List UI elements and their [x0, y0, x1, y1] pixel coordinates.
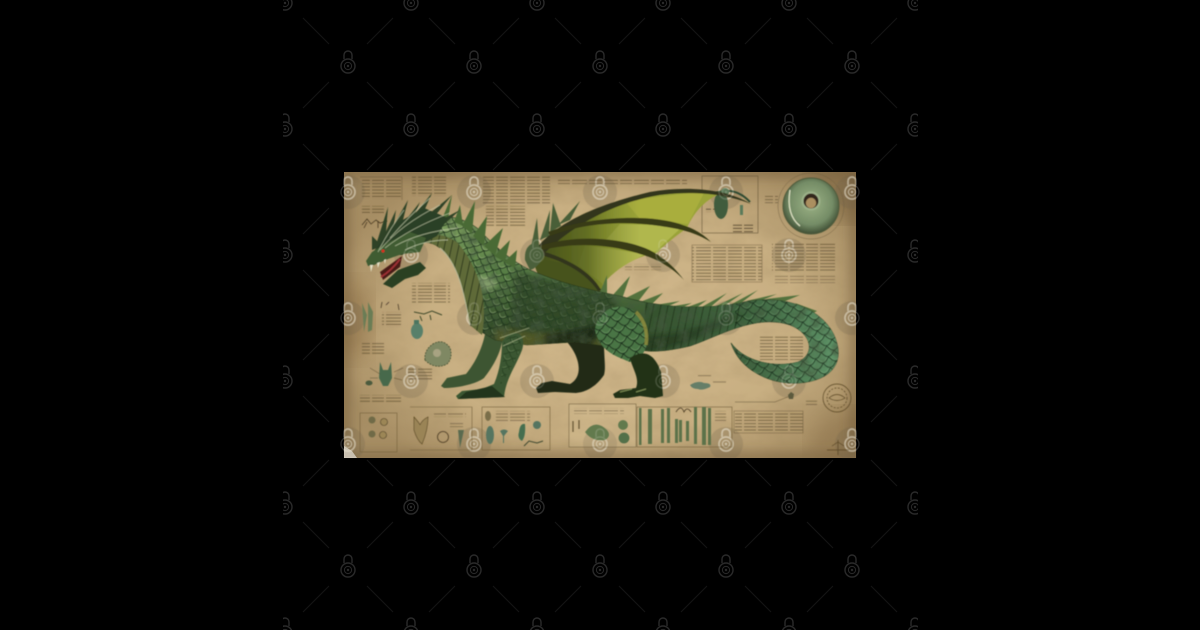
dark under wing [545, 325, 600, 350]
lower jaw [383, 262, 426, 288]
mouth [380, 256, 402, 280]
wing finger two [540, 239, 684, 280]
scales on neck and chest [398, 210, 528, 345]
sketch: claw study [414, 311, 442, 321]
upper head [366, 232, 426, 266]
hind lower leg and foot [613, 353, 663, 398]
sketch: green pod [411, 320, 423, 339]
note block top second [412, 176, 447, 196]
near hind leg [595, 307, 663, 398]
far hind leg [536, 335, 605, 393]
panel: specimen box 4 anatomy [569, 404, 636, 447]
neck underside plates [408, 235, 484, 335]
dragon head [366, 193, 517, 288]
note central right block [692, 245, 762, 282]
dragon body, neck and tail [398, 216, 838, 383]
note beside sketch [408, 367, 432, 380]
faint watermark over dragon [344, 172, 856, 458]
belly olive band [495, 328, 640, 355]
front leg scales [500, 336, 521, 386]
panel: specimen box 3 plants [482, 407, 550, 450]
note left lower [362, 342, 385, 355]
sketch: left margin squiggle [362, 219, 387, 228]
crest spikes [372, 193, 460, 250]
dragon [366, 188, 845, 399]
note inside tail curve [760, 335, 803, 360]
thigh edge [636, 312, 647, 345]
note block third continued [486, 206, 526, 226]
torso darker band [510, 272, 640, 350]
wing light panel lower [578, 245, 645, 284]
infographic: dragon anatomy parchment on watermarked black background [283, 0, 918, 630]
sketch: connector with tiny figure [735, 392, 817, 406]
wing lower root fold [535, 258, 602, 302]
eye [382, 250, 384, 252]
tail colouring [645, 295, 845, 390]
front leg shaft [456, 333, 523, 399]
wing spikes on shoulder [530, 201, 580, 252]
note small left [362, 206, 385, 213]
note below throat [412, 283, 450, 303]
front foot shade [458, 386, 505, 399]
note right block [772, 243, 837, 283]
sketch: cross-section scale disc [778, 173, 844, 239]
watermark pattern on black background [283, 0, 918, 630]
sketch: dragon head front view [366, 362, 403, 386]
torso scale texture [510, 272, 640, 350]
notes and sketches layer [360, 173, 851, 455]
sketch: ornament seal [823, 384, 851, 412]
sketch: bottom right corner mark [827, 440, 849, 455]
wing dark gradient near root [530, 188, 655, 303]
tongue [381, 259, 400, 277]
neck spikes [440, 195, 517, 268]
note block top left [360, 177, 402, 200]
note left mid [382, 314, 402, 326]
front leg ridge [500, 328, 529, 346]
chest highlight [471, 276, 497, 290]
panel: specimen box 1 [360, 413, 397, 452]
hind toe highlights [620, 389, 646, 392]
teeth [370, 259, 386, 272]
wing finger one [548, 218, 711, 242]
note eye label [765, 196, 778, 203]
sketch: organ cluster [425, 342, 451, 366]
tail underside shadow [640, 314, 745, 352]
note wing caption [624, 266, 662, 270]
note lower left caption [360, 395, 403, 402]
light watermark seals on parchment [344, 172, 856, 458]
sketch: small creature mid bottom [690, 374, 727, 390]
wing top arm [530, 189, 751, 260]
near front leg [456, 328, 529, 399]
note block top third [483, 176, 550, 204]
scales on tail tip [735, 295, 845, 390]
wing membrane [530, 188, 725, 303]
back spikes [600, 275, 817, 315]
sketch: wing anatomy figure top right [702, 176, 758, 233]
notes panel: text blocks [360, 176, 837, 433]
wing light panel top [625, 191, 705, 224]
tail mid texture [645, 295, 740, 355]
wing light panel middle [605, 224, 683, 252]
wing finger three [541, 251, 601, 291]
sketch: plant study left [362, 302, 399, 332]
body detail, clipped to silhouette [395, 205, 845, 390]
hind thigh [595, 307, 647, 362]
panel: specimen box 5 vertical bars [637, 407, 732, 447]
far front leg [441, 328, 503, 388]
wing elbow [525, 243, 544, 270]
panel: specimen box 2 claw [410, 407, 472, 450]
note header line [557, 178, 687, 184]
crest mass [372, 208, 448, 255]
crest highlights [378, 198, 458, 252]
mottled skin texture [395, 205, 845, 390]
dragon wing [525, 188, 751, 303]
parchment panel [344, 172, 856, 458]
note lower right block [734, 411, 803, 433]
